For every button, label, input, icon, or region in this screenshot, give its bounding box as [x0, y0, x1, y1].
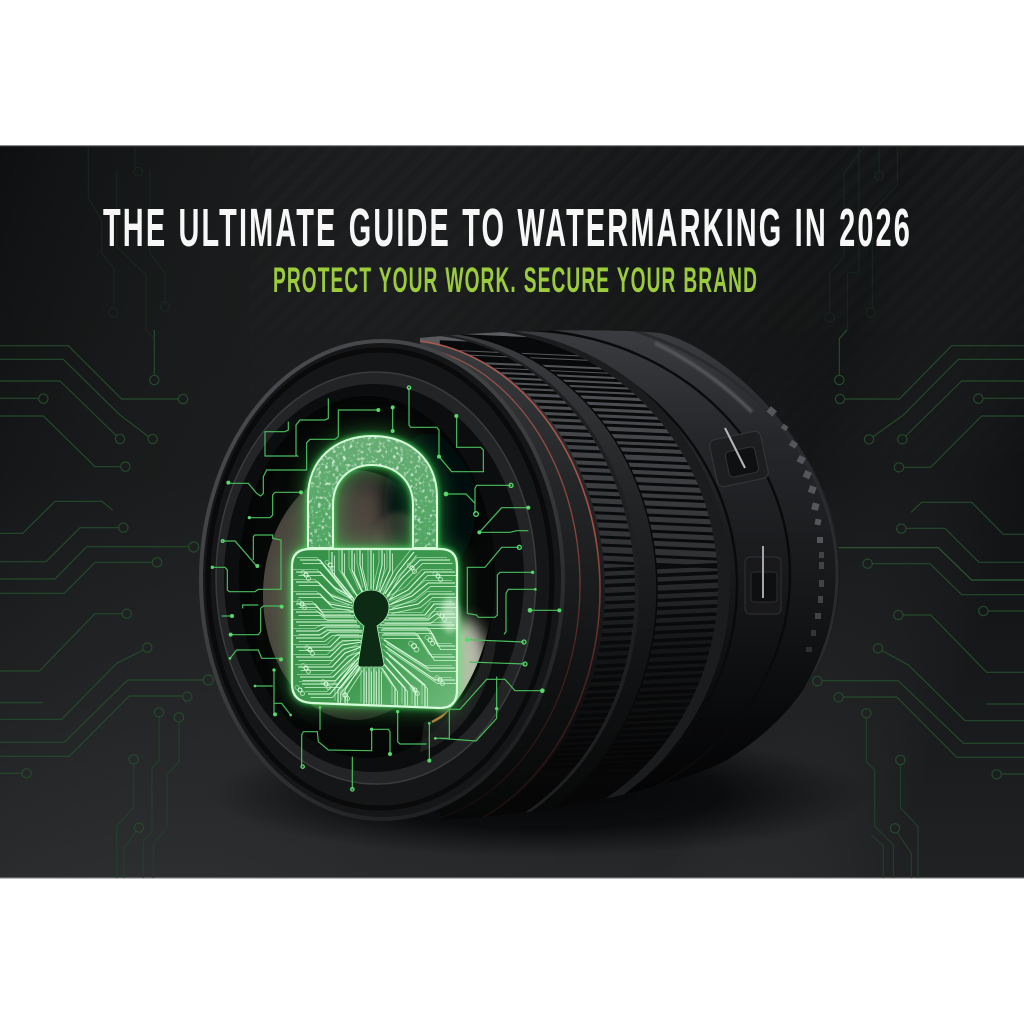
- lens flare patch: [420, 640, 496, 752]
- circuit traces: upper left faint: [88, 147, 170, 340]
- circuit traces: upper right faint: [825, 147, 897, 340]
- padlock shackle: [304, 432, 442, 550]
- front grip band: [420, 336, 635, 817]
- camera lens: [199, 330, 839, 821]
- glass lens: [263, 434, 490, 723]
- circuit traces: right side: [813, 330, 1024, 878]
- circuit traces: left side: [0, 330, 213, 878]
- padlock body: [292, 549, 457, 708]
- lens switch upper: [709, 428, 769, 488]
- barrel section lines: [522, 330, 838, 689]
- infographic poster: [0, 145, 1024, 879]
- lens barrel: [420, 330, 839, 812]
- padlock keyhole: [353, 590, 389, 667]
- rear grip band: [463, 332, 718, 808]
- aperture scale marks: [766, 406, 824, 652]
- glowing circuit traces on lens: [211, 386, 561, 791]
- padlock glow: [292, 436, 457, 708]
- padlock: [292, 432, 459, 710]
- lens switch lower: [745, 546, 781, 614]
- front bezel rings: [201, 341, 563, 819]
- padlock circuit traces: [293, 548, 458, 710]
- dark background band: [0, 145, 1024, 879]
- trace nodes hollow: [221, 386, 527, 791]
- red accent rings: [420, 340, 601, 818]
- lens ground shadow: [254, 758, 819, 848]
- trace nodes filled: [211, 405, 561, 763]
- padlock right highlight: [441, 597, 459, 633]
- trace lines: [212, 388, 559, 789]
